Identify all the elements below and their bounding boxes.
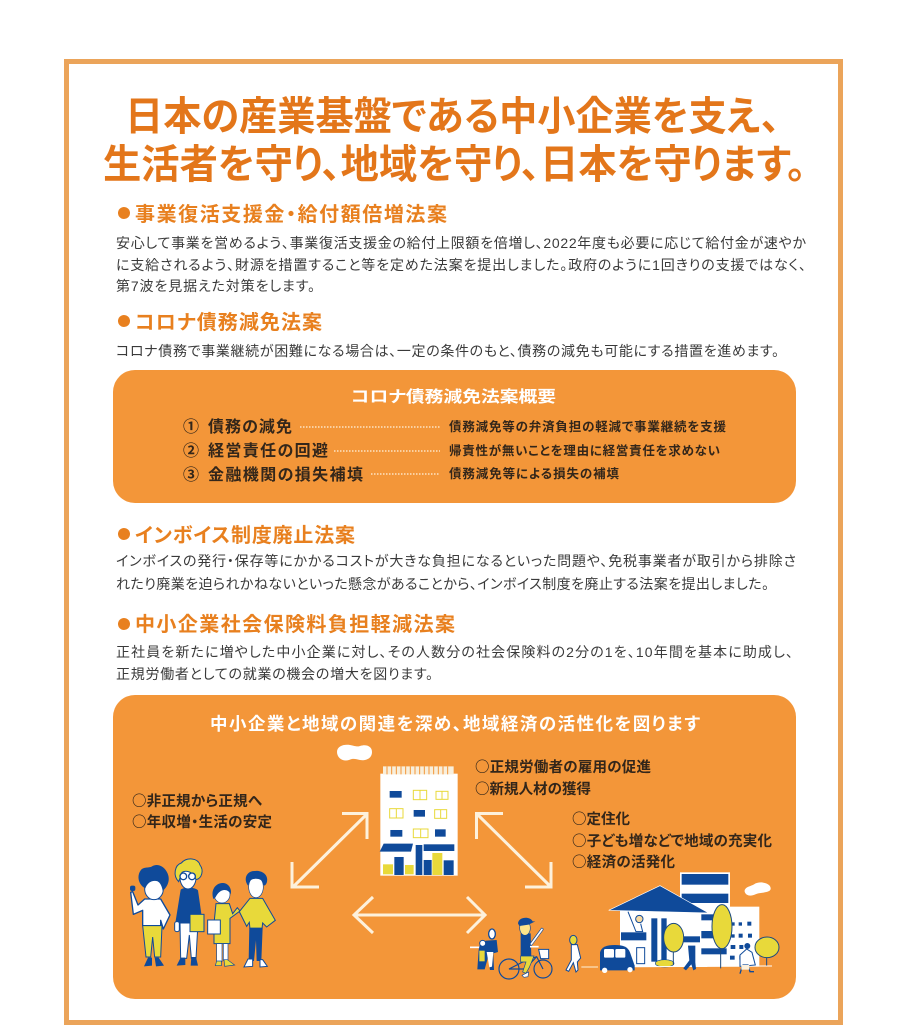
arrow: workers to company [292, 814, 367, 887]
body text: インボイスの発行・保存等にかかるコストが大きな負担になるといった問題や、免税事業者が取引から排除さ [116, 553, 796, 569]
row 2: ② [183, 442, 199, 460]
community benefits text: ○子ども増などで地域の充実化 [572, 830, 772, 851]
pedestrians left [470, 929, 498, 970]
row 1: ① [183, 418, 199, 436]
title: 生活者を守り、地域を守り、日本を守ります。 [103, 143, 806, 187]
section: 事業復活支援金・給付額倍増法案 [116, 203, 806, 294]
body text [116, 235, 806, 294]
body text: れたり廃業を迫られかねないといった懸念があることから、インボイス制度を廃止する法案を提出しました。 [116, 576, 769, 592]
body text: に支給されるよう、財源を措置すること等を定めた法案を提出しました。政府のように1回きりの支援ではなく、 [116, 257, 806, 273]
person 2 [175, 859, 204, 966]
arrow: workers to community [354, 897, 485, 933]
row 3: ③ [183, 466, 199, 484]
row 1 [183, 417, 726, 436]
worker benefits text [132, 790, 272, 832]
heading: 中小企業社会保険料負担軽減法案: 中小企業社会保険料負担軽減法案 [135, 612, 455, 636]
row 1: 債務減免等の弁済負担の軽減で事業継続を支援 [449, 419, 726, 434]
icon: company building [380, 766, 458, 876]
pedestrians [683, 943, 755, 974]
heading: コロナ債務減免法案: コロナ債務減免法案 [135, 310, 322, 334]
company benefits text: ○正規労働者の雇用の促進 [475, 756, 652, 777]
worker benefits text: ○非正規から正規へ [132, 790, 262, 811]
row 2: 経営責任の回避 [208, 441, 328, 460]
icon: cloud above company [337, 745, 372, 761]
section: インボイス制度廃止法案 [116, 524, 796, 592]
section: 中小企業社会保険料負担軽減法案 [116, 612, 793, 682]
person 3 [208, 883, 240, 966]
community benefits text: ○定住化 [572, 808, 630, 829]
company benefits text [475, 756, 652, 799]
row 3: 債務減免等による損失の補填 [449, 466, 619, 481]
illustration: four people [130, 859, 275, 967]
body text: 正社員を新たに増やした中小企業に対し、その人数分の社会保険料の2分の1を、10年間を基本に助成し、 [116, 644, 793, 660]
title [103, 95, 806, 187]
panel heading: コロナ債務減免法案概要 [351, 387, 556, 406]
trees [664, 905, 779, 968]
row 2 [183, 441, 720, 460]
person 1 [130, 865, 170, 966]
body text [116, 553, 796, 592]
panel heading: 中小企業と地域の関連を深め、地域経済の活性化を図ります [210, 714, 700, 734]
pedestrian right [566, 935, 581, 972]
body text: 安心して事業を営めるよう、事業復活支援金の給付上限額を倍増し、2022年度も必要に応じて給付金が速やか [116, 235, 806, 251]
illustration: cyclist and pedestrians [470, 918, 598, 979]
company benefits text: ○新規人材の獲得 [475, 778, 591, 799]
row 3: 金融機関の損失補填 [208, 465, 363, 484]
panel: 地域経済の活性化 [113, 695, 796, 999]
apartment block [680, 872, 759, 967]
car [600, 945, 635, 973]
icon: cloud [745, 882, 771, 896]
section: コロナ債務減免法案 [116, 310, 779, 359]
worker benefits text: ○年収増・生活の安定 [132, 811, 272, 832]
waving child [628, 912, 643, 932]
body text: 正規労働者としての就業の機会の増大を図ります。 [116, 666, 433, 682]
body text: コロナ債務で事業継続が困難になる場合は、一定の条件のもと、債務の減免も可能にする措置を進めます。 [116, 343, 779, 359]
heading: インボイス制度廃止法案: インボイス制度廃止法案 [135, 524, 355, 547]
arrow: company to community [476, 814, 551, 887]
community benefits text [572, 808, 772, 872]
row 1: 債務の減免 [208, 417, 292, 436]
body text: 第7波を見据えた対策をします。 [116, 278, 315, 294]
title: 日本の産業基盤である中小企業を支え、 [125, 95, 780, 139]
illustration: town houses and car [600, 872, 779, 974]
heading: 事業復活支援金・給付額倍増法案: 事業復活支援金・給付額倍増法案 [135, 203, 447, 226]
community benefits text: ○経済の活発化 [572, 851, 676, 872]
house [609, 886, 727, 967]
panel: コロナ債務減免法案概要 [113, 370, 796, 503]
row 3 [183, 465, 619, 484]
cyclist [499, 918, 552, 979]
row 2: 帰責性が無いことを理由に経営責任を求めない [449, 443, 720, 458]
body text [116, 644, 793, 682]
person 4 [239, 871, 275, 967]
